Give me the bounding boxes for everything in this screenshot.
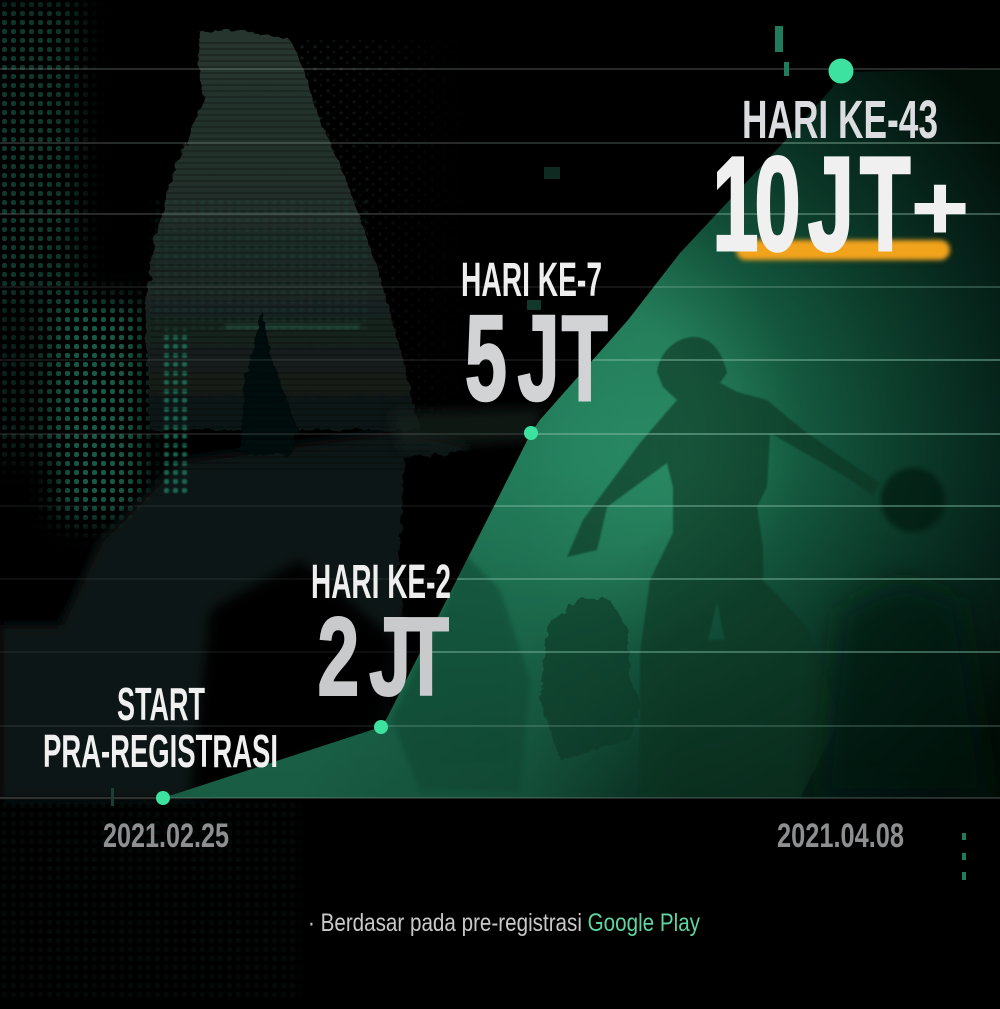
gridlines highlighted inside area [388, 142, 1000, 727]
footnote: · Berdasar pada pre-registrasi Google Play [308, 909, 700, 937]
background figure: hazy silhouette [0, 0, 505, 1000]
milestone label: day 43 [712, 90, 969, 279]
orange brush highlight [736, 240, 950, 260]
milestone dot: day 2 [374, 720, 388, 734]
start date: 2021.02.25 [103, 817, 229, 855]
matrix dots left column [2, 2, 160, 538]
milestone dot: start [156, 791, 170, 805]
milestone dot: day 43 [828, 58, 854, 84]
milestone label: day 43: 10JT [712, 129, 911, 279]
milestone label: day 2: 2JT [317, 596, 449, 720]
milestone label: day 43: + [911, 157, 969, 259]
milestone label: day 2: HARI KE-2 [311, 556, 451, 609]
milestone dot: day 7 [524, 426, 538, 440]
area chart: registrations growth [163, 69, 1000, 798]
milestone label: start of pre-registration [43, 678, 278, 777]
mid backdrop panel behind chart edge [390, 408, 545, 448]
end date: 2021.04.08 [777, 817, 904, 855]
soldier silhouette [392, 337, 990, 798]
milestone label: start of pre-registration: PRA-REGISTRASI [43, 725, 278, 777]
horizontal chart gridlines [0, 69, 1000, 798]
milestone label: day 7: 5JT [465, 289, 608, 426]
decorative teal marks [111, 26, 966, 880]
milestone label: day 7: HARI KE-7 [461, 254, 602, 307]
milestone label: start of pre-registration: START [117, 678, 205, 730]
